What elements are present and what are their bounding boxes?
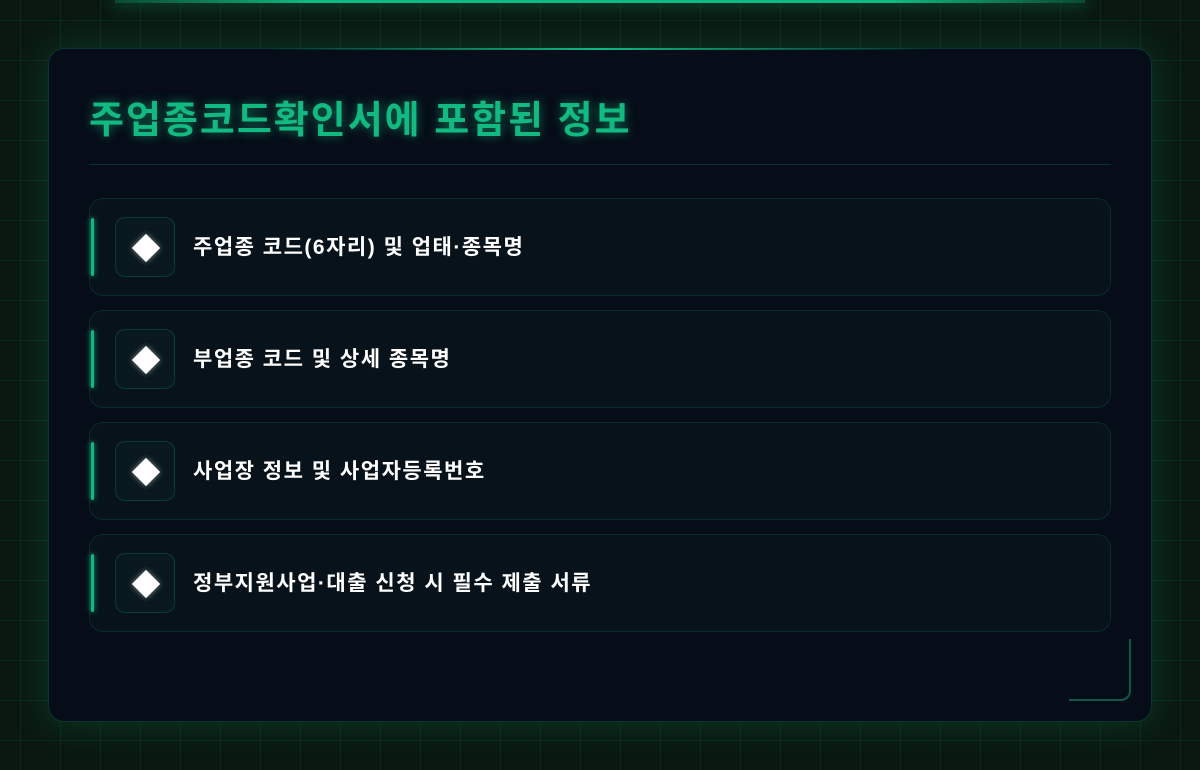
- item 3: [89, 422, 1111, 520]
- corner accent: [1069, 639, 1131, 701]
- text: 주업종 코드(6자리) 및 업태·종목명: [193, 236, 524, 259]
- text: 정부지원사업·대출 신청 시 필수 제출 서류: [193, 572, 592, 595]
- text: 사업장 정보 및 사업자등록번호: [193, 460, 486, 483]
- item 2: [89, 310, 1111, 408]
- icon: diamond: [115, 441, 175, 501]
- title: 주업종코드확인서에 포함된 정보: [89, 100, 632, 142]
- item 1: [89, 198, 1111, 296]
- text: 부업종 코드 및 상세 종목명: [193, 348, 451, 371]
- icon: diamond: [115, 217, 175, 277]
- icon: diamond: [115, 553, 175, 613]
- icon: diamond: [115, 329, 175, 389]
- item 4: [89, 534, 1111, 632]
